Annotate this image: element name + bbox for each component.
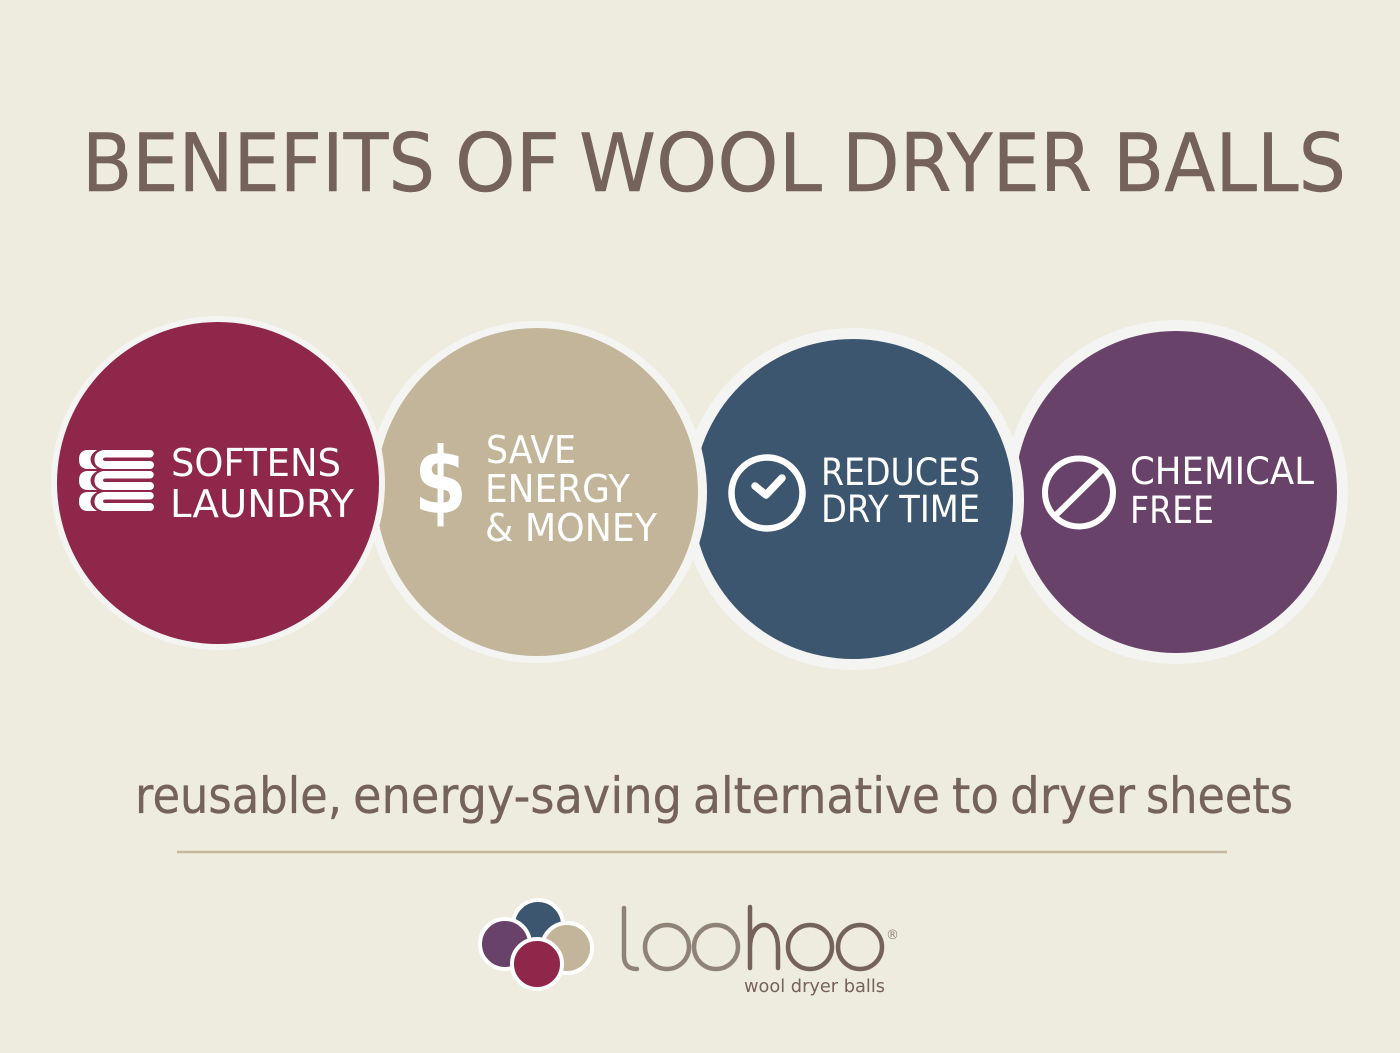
subtitle: alternative [693,767,940,825]
label: save energy and money: SAVE [486,428,576,473]
label: softens laundry [170,441,354,527]
logo mark: four balls [480,900,592,989]
label: save energy and money [485,428,657,551]
subtitle: reusable, [135,767,342,825]
subtitle: to [952,767,999,825]
subtitle: dryer [1010,767,1135,825]
title: OF [455,117,560,210]
title: BENEFITS [82,117,435,210]
label: save energy and money: & MONEY [485,506,657,551]
icon: stack of folded towels [79,450,154,511]
logo: loohoo [480,900,899,997]
subtitle: sheets [1146,767,1293,825]
subtitle: energy-saving [353,767,682,825]
logo tagline: wool dryer balls [744,976,885,997]
label: chemical free: FREE [1130,489,1214,532]
label: reduces dry time [821,451,980,531]
subtitle [135,767,1293,825]
label: reduces dry time: DRY TIME [821,488,980,531]
label: chemical free [1130,450,1314,532]
panel: reduces dry time [682,328,1024,670]
title: BALLS [1113,117,1346,210]
title: WOOL [579,117,822,210]
title [82,117,1346,210]
registered mark: ® [886,928,899,943]
icon: dollar sign: $ [414,428,467,535]
label: reduces dry time: REDUCES [821,451,980,494]
label: save energy and money: ENERGY [485,467,630,512]
panel: chemical free [1004,320,1348,664]
title: DRYER [842,117,1092,210]
logo wordmark [624,907,882,969]
panel: save energy and money [367,321,707,663]
label: chemical free: CHEMICAL [1130,450,1314,493]
label: softens laundry: LAUNDRY [170,482,354,527]
panel: softens laundry [51,316,385,650]
icon: prohibited sign [1045,458,1113,526]
icon: clock check [732,458,802,528]
label: softens laundry: SOFTENS [171,441,341,486]
